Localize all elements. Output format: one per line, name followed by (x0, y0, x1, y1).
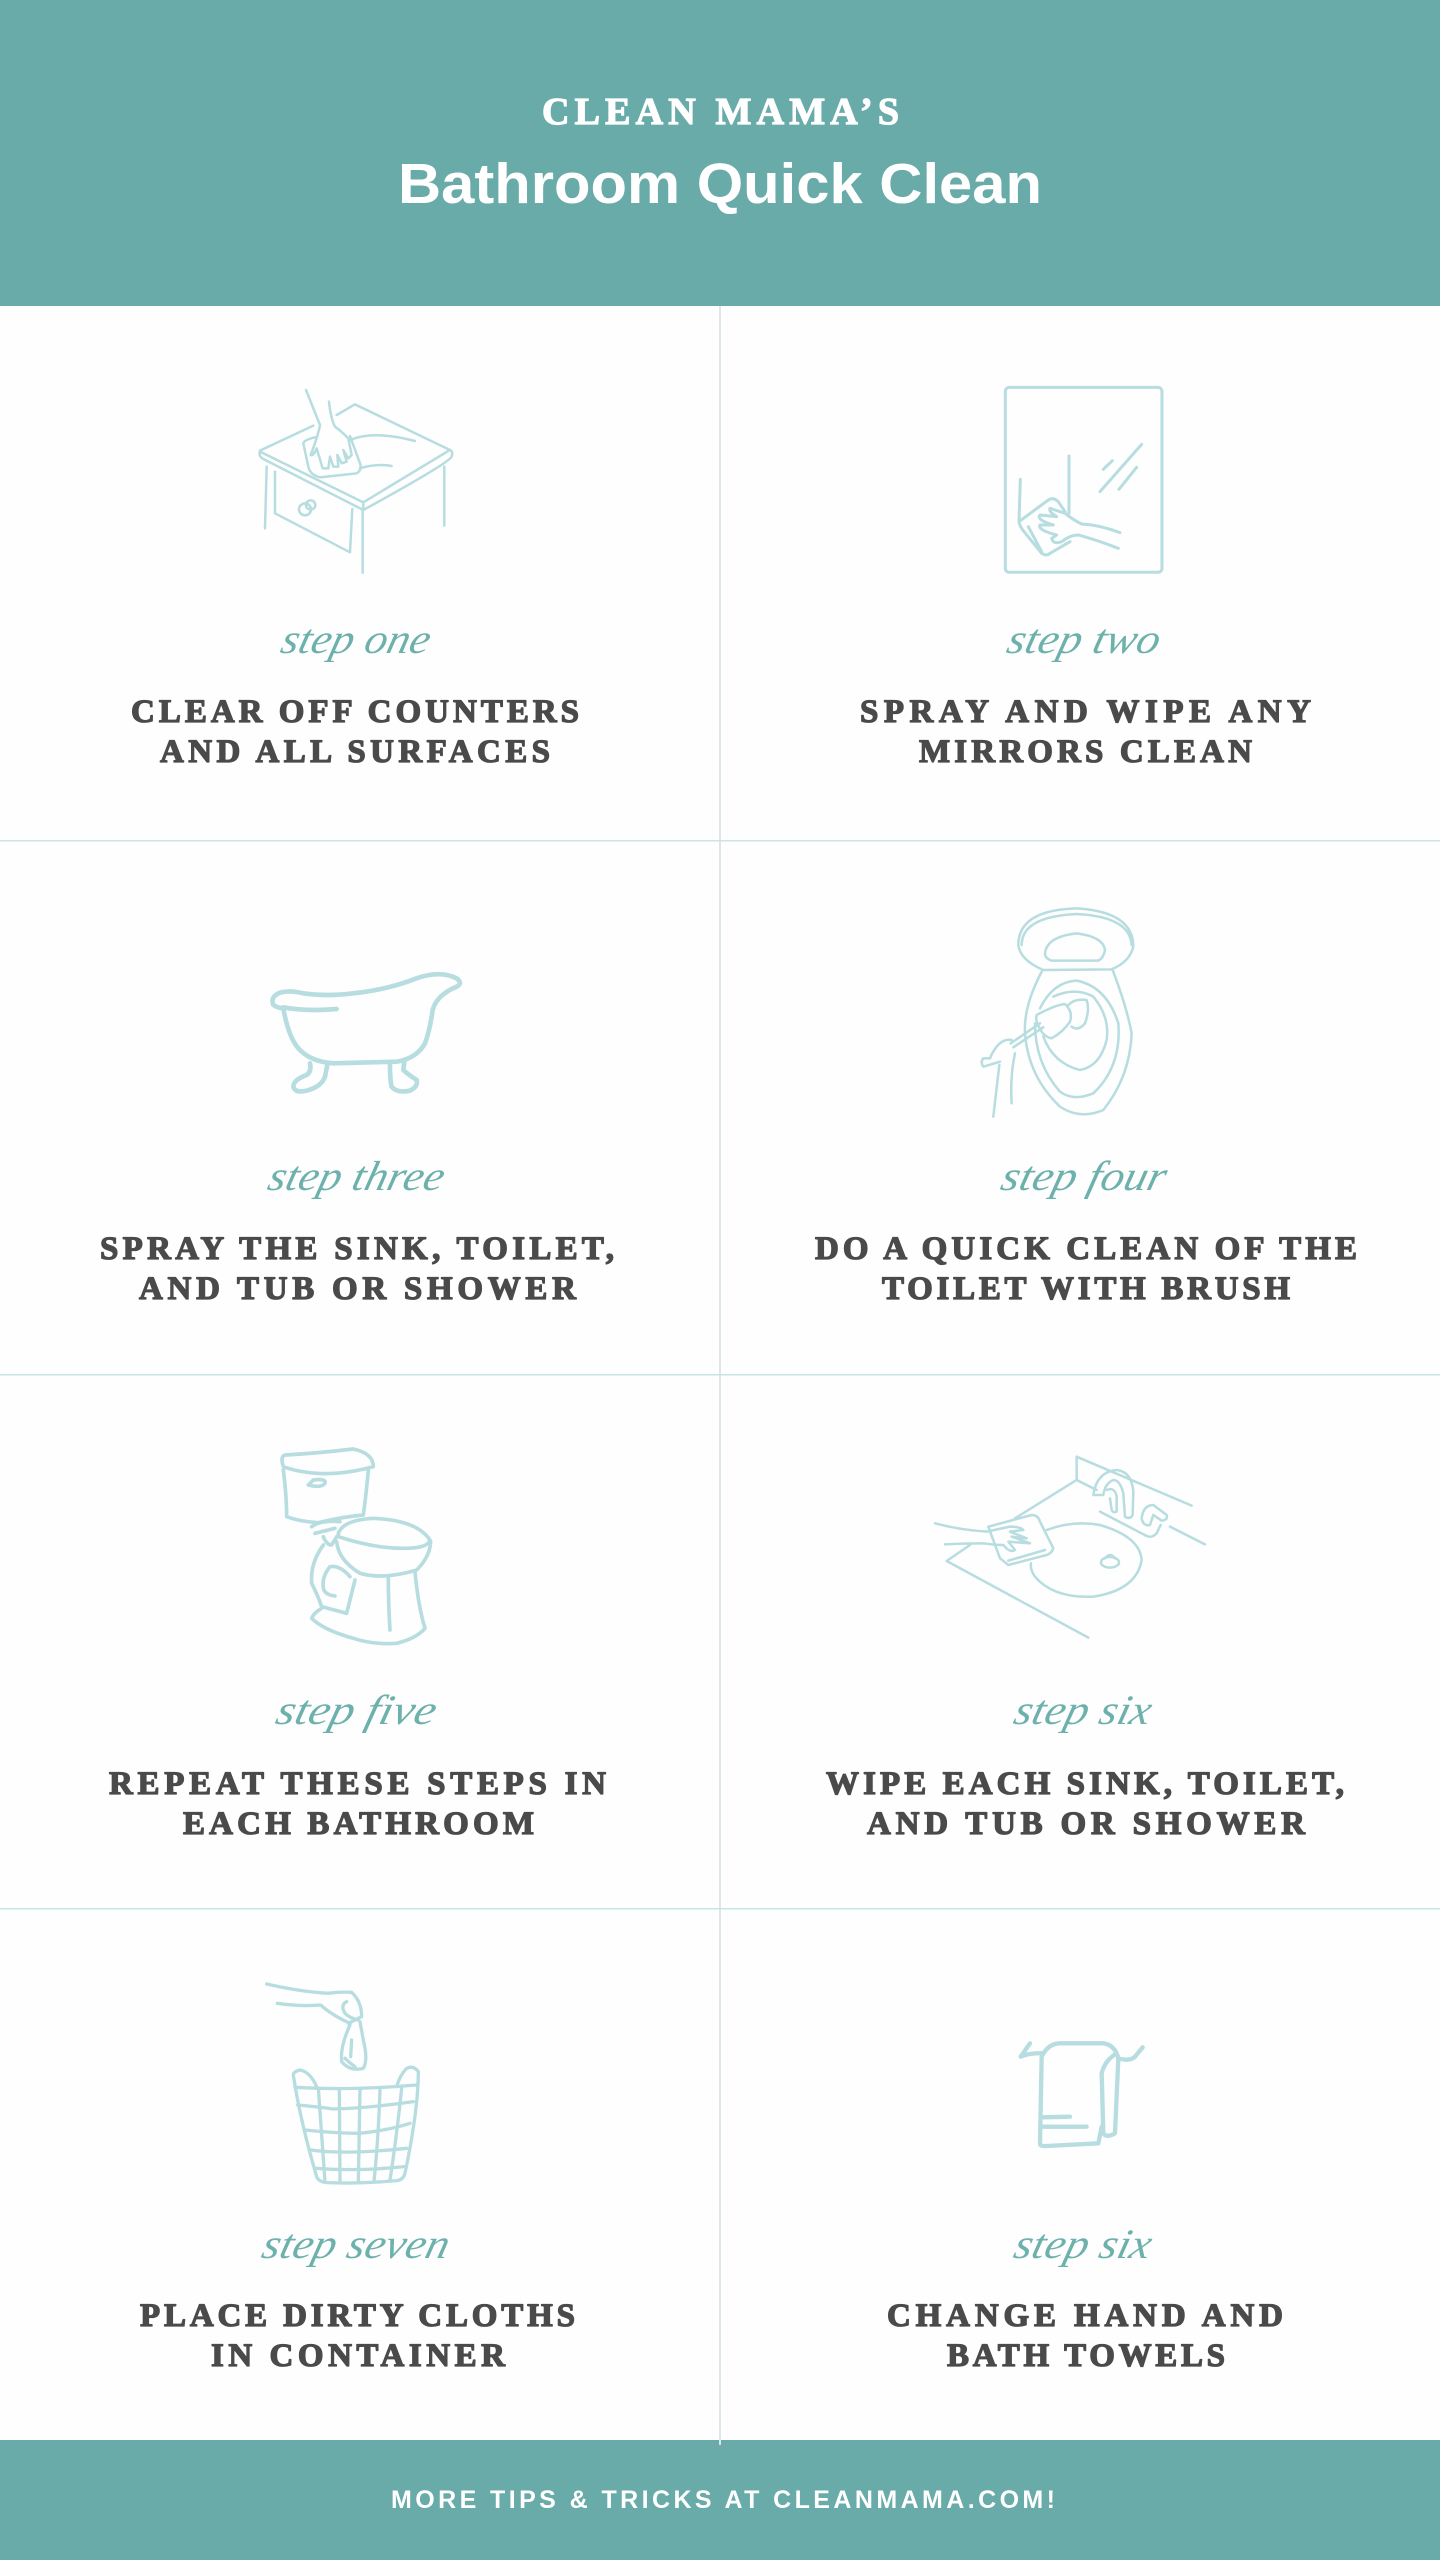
step instruction: SPRAY THE SINK, TOILET, (100, 1231, 614, 1267)
step instruction: AND TUB OR SHOWER (867, 1806, 1306, 1842)
icon: clawfoot bathtub (272, 974, 460, 1091)
icon: towel on rack (1021, 2043, 1143, 2146)
icon: hand wiping counter (260, 390, 452, 573)
step label: step five (272, 1688, 442, 1734)
step label: step six (1010, 1688, 1157, 1734)
panel: step six (826, 1457, 1344, 1842)
panel: step five (109, 1449, 606, 1842)
main title: Bathroom Quick Clean (398, 152, 1042, 216)
panel: step seven (140, 1984, 575, 2374)
step label: step three (264, 1154, 450, 1200)
step label: step seven (258, 2222, 455, 2268)
icon: cloth dropped in basket (267, 1984, 418, 2183)
step instruction: WIPE EACH SINK, TOILET, (826, 1766, 1344, 1802)
step instruction: DO A QUICK CLEAN OF THE (815, 1231, 1357, 1267)
panel: step eight (887, 2043, 1283, 2374)
step label: step four (997, 1154, 1173, 1200)
step instruction: EACH BATHROOM (183, 1806, 534, 1842)
footer band (0, 2440, 1440, 2560)
panel: step three (100, 974, 614, 1307)
step instruction (140, 2298, 575, 2374)
icon: hand wiping mirror (1005, 387, 1162, 572)
panel: step two (860, 387, 1311, 770)
step instruction (100, 1231, 614, 1307)
title eyebrow: CLEAN MAMA’S (542, 91, 899, 133)
step instruction: TOILET WITH BRUSH (882, 1271, 1290, 1307)
step instruction: CLEAR OFF COUNTERS (131, 694, 579, 730)
step instruction: CHANGE HAND AND (887, 2298, 1283, 2334)
step instruction: REPEAT THESE STEPS IN (109, 1766, 606, 1802)
step label: step six (1010, 2222, 1157, 2268)
header band (0, 0, 1440, 306)
footer text: MORE TIPS & TRICKS AT CLEANMAMA.COM! (391, 2486, 1055, 2514)
step instruction (826, 1766, 1344, 1842)
step instruction (131, 694, 579, 770)
icon: toilet side view (282, 1449, 431, 1644)
icon: hand wiping sink (935, 1457, 1205, 1638)
step instruction: PLACE DIRTY CLOTHS (140, 2298, 575, 2334)
step instruction (109, 1766, 606, 1842)
step instruction: MIRRORS CLEAN (919, 734, 1252, 770)
step label: step one (277, 617, 436, 663)
step label: step two (1003, 617, 1166, 663)
icon: toilet brush in bowl (982, 908, 1133, 1117)
step instruction: AND ALL SURFACES (160, 734, 550, 770)
step instruction: AND TUB OR SHOWER (139, 1271, 577, 1307)
step instruction (887, 2298, 1283, 2374)
step instruction: BATH TOWELS (947, 2338, 1225, 2374)
panel: step four (815, 908, 1357, 1307)
step instruction: IN CONTAINER (211, 2338, 506, 2374)
step instruction (860, 694, 1311, 770)
step instruction: SPRAY AND WIPE ANY (860, 694, 1311, 730)
step instruction (815, 1231, 1357, 1307)
panel: step one (131, 390, 579, 770)
